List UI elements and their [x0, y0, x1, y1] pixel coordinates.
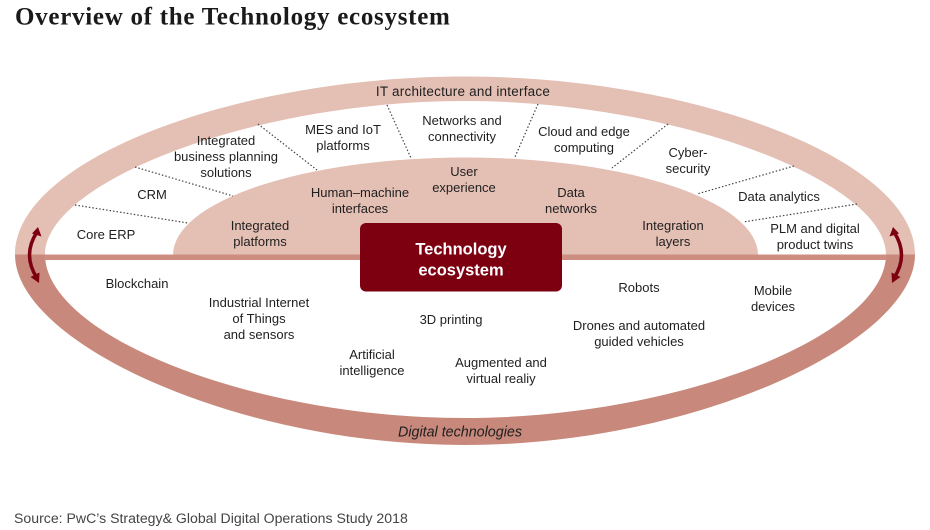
- label: Data networks: Data: [557, 185, 585, 200]
- label: Integrated platforms: platforms: [233, 234, 287, 249]
- label: Data networks: [545, 185, 598, 216]
- central box: Technology ecosystem: Technology: [415, 240, 507, 258]
- label: Artificial intelligence: Artificial: [349, 347, 395, 362]
- label: Core ERP: Core ERP: [77, 227, 135, 242]
- label: Robots: Robots: [618, 280, 660, 295]
- label: Mobile devices: [751, 283, 796, 314]
- label: Artificial intelligence: [339, 347, 405, 378]
- label: Industrial Internet of Things and sensors: Industrial Internet: [209, 295, 310, 310]
- label: Augmented and virtual reality: [455, 355, 547, 386]
- label: Mobile devices: Mobile: [754, 283, 792, 298]
- outer ring: IT architecture (upper half): [15, 76, 915, 254]
- label: MES and IoT platforms: platforms: [316, 138, 370, 153]
- ring label: IT architecture and interface: IT architecture and interface: [376, 84, 550, 99]
- label: Augmented and virtual reality: Augmented and: [455, 355, 547, 370]
- label: Cyber-security: security: [666, 161, 711, 176]
- label: Data analytics: Data analytics: [738, 189, 820, 204]
- source line: Source: PwC’s Strategy& Global Digital Operations Study 2018: [14, 510, 408, 526]
- label: CRM: CRM: [137, 187, 167, 202]
- outer ring: digital technologies (lower half): [15, 254, 915, 445]
- label: Cyber-security: [666, 145, 711, 176]
- label: Integration layers: layers: [656, 234, 691, 249]
- label: Drones and automated guided vehicles: guided vehicles: [594, 334, 684, 349]
- label: Industrial Internet of Things and sensors: and sensors: [224, 327, 295, 342]
- label: Cyber-security: Cyber-: [668, 145, 708, 160]
- label: Integrated business planning solutions: business planning: [174, 149, 278, 164]
- label: Blockchain: Blockchain: [106, 276, 168, 291]
- label: Integration layers: Integration: [642, 218, 704, 233]
- label: Integrated platforms: Integrated: [231, 218, 289, 233]
- label: Integrated business planning solutions: [174, 133, 278, 180]
- label: PLM and digital product twins: PLM and digital: [770, 221, 860, 236]
- ring label: Digital technologies: Digital technologies: [398, 424, 522, 440]
- label: Integration layers: [642, 218, 704, 249]
- label: User experience: User: [450, 164, 478, 179]
- title: Overview of the Technology ecosystem: [15, 4, 451, 30]
- label: Human-machine interfaces: [311, 185, 409, 216]
- label: Cloud and edge computing: computing: [554, 140, 614, 155]
- label: Data networks: networks: [545, 201, 598, 216]
- label: Networks and connectivity: Networks and: [422, 113, 502, 128]
- label: Networks and connectivity: connectivity: [428, 129, 496, 144]
- label: Integrated platforms: [231, 218, 289, 249]
- label: PLM and digital product twins: [770, 221, 860, 252]
- dome: technology layer: [173, 158, 758, 255]
- label: 3D printing: 3D printing: [420, 312, 482, 327]
- label: Networks and connectivity: [422, 113, 502, 144]
- central box: Technology ecosystem: [360, 223, 562, 292]
- label: User experience: experience: [432, 180, 496, 195]
- label: Human-machine interfaces: Human–machine: [311, 185, 409, 200]
- label: PLM and digital product twins: product twins: [777, 237, 854, 252]
- label: Drones and automated guided vehicles: Drones and automated: [573, 318, 705, 333]
- label: Augmented and virtual reality: virtual realiy: [466, 371, 536, 386]
- label: MES and IoT platforms: MES and IoT: [305, 122, 381, 137]
- label: Human-machine interfaces: interfaces: [332, 201, 389, 216]
- label: Industrial Internet of Things and sensors: of Things: [232, 311, 286, 326]
- label: Cloud and edge computing: [538, 124, 630, 155]
- label: Integrated business planning solutions: solutions: [200, 165, 252, 180]
- label: Industrial Internet of Things and sensors: [209, 295, 310, 342]
- icon: left double arrow: [30, 227, 42, 283]
- horizontal divider band: [44, 254, 887, 260]
- label: Drones and automated guided vehicles: [573, 318, 705, 349]
- label: Mobile devices: devices: [751, 299, 796, 314]
- dotted separators: [75, 104, 857, 223]
- label: Integrated business planning solutions: Integrated: [197, 133, 255, 148]
- label: Artificial intelligence: intelligence: [339, 363, 405, 378]
- icon: right double arrow: [890, 227, 902, 283]
- label: MES and IoT platforms: [305, 122, 381, 153]
- central box: Technology ecosystem: ecosystem: [418, 262, 504, 280]
- label: Cloud and edge computing: Cloud and edge: [538, 124, 630, 139]
- label: User experience: [432, 164, 496, 195]
